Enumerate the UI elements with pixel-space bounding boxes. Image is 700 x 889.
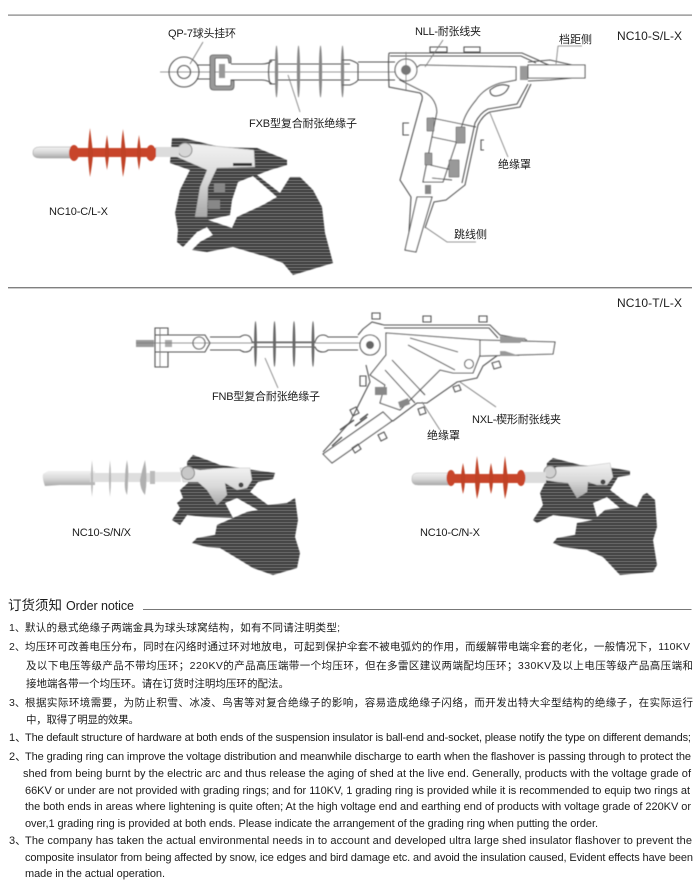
text block: English notes: the both ends in areas where lightening is quite often; At the high voltage end and earthing end of products with voltage grade of 220KV or (25, 801, 691, 813)
silver clamp (177, 143, 255, 217)
panel: NC10-C/N-X photo (412, 456, 657, 575)
label: NC10-C/N-X: NC10-C/N-X (420, 527, 481, 539)
red insulator (33, 128, 179, 177)
text block: Chinese notes: 中，取得了明显的效果。 (26, 713, 139, 726)
text block: English notes: 3、 (9, 835, 26, 847)
label: span side: 档距侧 (559, 32, 592, 46)
panel: NC10-T/L-X line drawing (136, 313, 555, 463)
text block: Chinese notes: 3、 (9, 697, 25, 709)
text block: Chinese notes: 及以下电压等级产品不带均压环；220KV的产品高压端带一个均压环，但在多雷区建议两端配均压环；330KV及以上电压等级产品高压端和 (26, 659, 693, 672)
heading: order notice (8, 597, 692, 613)
black cover body (170, 138, 333, 275)
silver clamp (543, 463, 613, 498)
text block: Chinese notes: 根据实际环境需要，为防止积雪、冰凌、鸟害等对复合绝缘子的影响，容易造成绝缘子闪络，而开发出特大伞型结构的绝缘子，在实际运行 (25, 696, 694, 709)
FXB insulator sheds (268, 46, 395, 98)
text block: Chinese notes (9, 621, 694, 726)
heading: order notice: Order notice (66, 599, 134, 613)
leader lines top drawing (190, 40, 582, 242)
panel: NC10-C/L-X photo (33, 128, 333, 275)
white insulator (43, 460, 181, 497)
text block: Chinese notes: 2、 (9, 641, 25, 653)
label: cover lower: 绝缘罩 (427, 428, 460, 442)
heading: order notice: 订货须知 (8, 597, 62, 613)
label: QP-7: QP-7球头挂环 (168, 26, 236, 40)
NXL wedge clamp with cover (323, 313, 555, 463)
label: jumper side: 跳线侧 (454, 227, 487, 241)
label: NC10-C/L-X: NC10-C/L-X (49, 206, 109, 218)
text block: English notes: The company has taken the actual environmental needs in to account and developed ultra large shed insulator flashover to prevent the (25, 835, 692, 847)
text block: English notes: 2、 (9, 751, 26, 763)
text block: English notes: The default structure of hardware at both ends of the suspension insulator is ball-end and-socket, please notify the type on different demands; (25, 732, 691, 744)
ball eye QP-7 (160, 55, 410, 90)
leader lines lower drawing (265, 358, 496, 430)
clevis end (136, 328, 370, 367)
FNB insulator sheds (210, 321, 358, 367)
label: FNB insulator: FNB型复合耐张绝缘子 (212, 389, 320, 403)
label: NXL clamp: NXL-楔形耐张线夹 (472, 412, 561, 426)
text block: English notes: over,1 grading ring is provided at both ends. Please indicate the arrangement of the grading ring when putting the order. (25, 818, 598, 830)
silver clamp (180, 468, 252, 505)
text block: English notes: composite insulator from being affected by snow, ice edges and bird damage etc. and avoid the insulation caused, Evident effects have been (25, 852, 693, 864)
label: NC10-S/L-X: NC10-S/L-X (617, 29, 682, 43)
text block: English notes (9, 732, 693, 880)
label: FXB insulator: FXB型复合耐张绝缘子 (249, 116, 357, 130)
black body (172, 455, 300, 575)
text block: English notes: shed from being burnt by the electric arc and thus release the aging of shed at the live end. Generally, products with the voltage grade of (23, 768, 692, 780)
label: NC10-S/N/X: NC10-S/N/X (72, 527, 132, 539)
label: cover: 绝缘罩 (498, 157, 531, 171)
NLL tension clamp with cover (388, 47, 585, 252)
text block: English notes: 66KV or under are not provided with grading rings; and for 110KV, 1 grading ring is provided while it is recommended to equip two rings at (25, 785, 690, 797)
label: NLL: NLL-耐张线夹 (415, 24, 481, 38)
black body (533, 458, 657, 575)
panel: NC10-S/N/X photo (43, 455, 300, 575)
text block: English notes: 1、 (9, 732, 26, 744)
text block: English notes: The grading ring can improve the voltage distribution and meanwhile discharge to earth when the flashover is passing through to protect the (25, 751, 691, 763)
text block: Chinese notes: 接地端各带一个均压环。请在订货时注明均压环的配法。 (26, 677, 289, 690)
text block: Chinese notes: 1、 (9, 622, 25, 634)
text block: Chinese notes: 默认的悬式绝缘子两端金具为球头球窝结构，如有不同请注明类型; (25, 621, 340, 634)
panel: NC10-S/L-X line drawing (160, 40, 585, 252)
label: NC10-T/L-X: NC10-T/L-X (617, 296, 682, 310)
red insulator (412, 456, 546, 499)
text block: Chinese notes: 均压环可改善电压分布，同时在闪络时通过环对地放电，可起到保护伞套不被电弧灼的作用，而缓解带电端伞套的老化，一般情况下，110KV (25, 640, 690, 653)
text block: English notes: made in the actual operation. (25, 868, 165, 880)
